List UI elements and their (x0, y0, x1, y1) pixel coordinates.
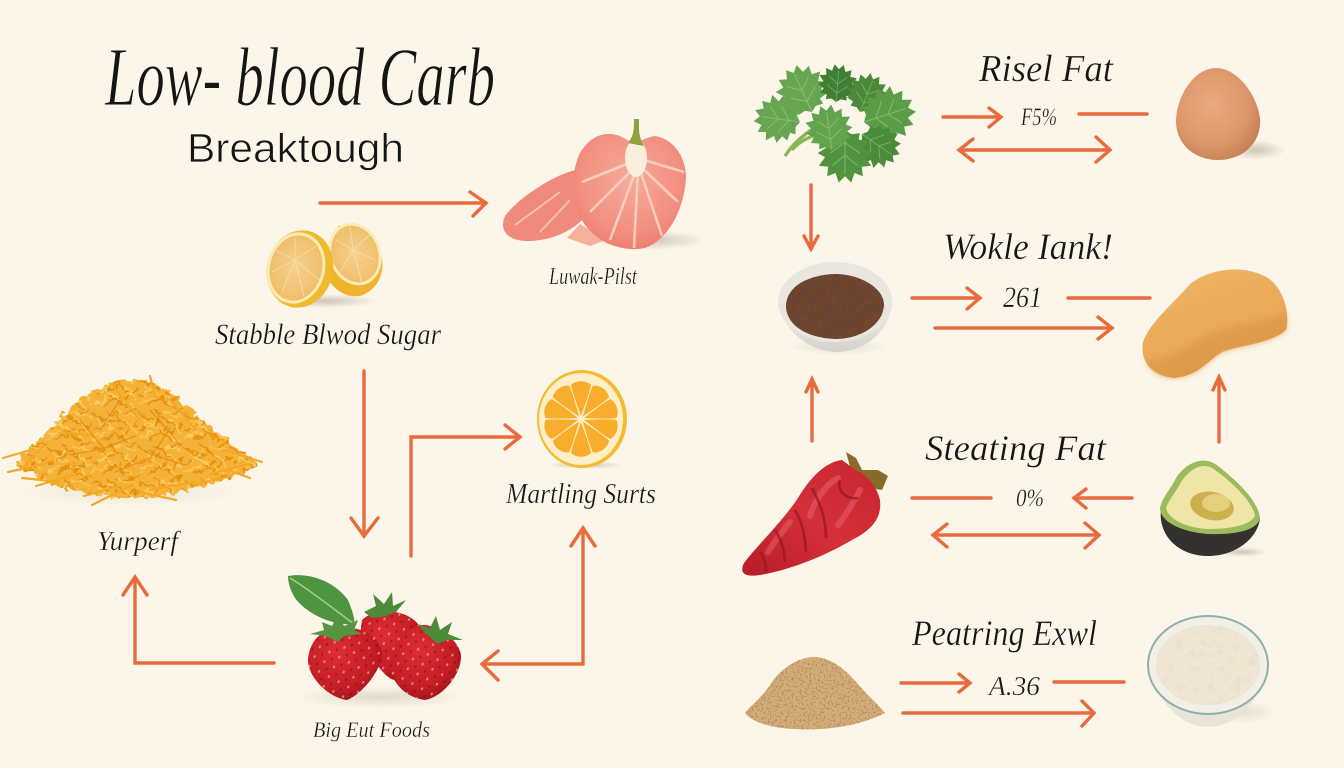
white core (625, 139, 647, 177)
icon: grapefruit (503, 119, 706, 250)
left lemon flesh (259, 226, 333, 310)
icon: avocado (1160, 461, 1268, 557)
icon: grain pile (745, 657, 885, 729)
small wedge (503, 170, 586, 241)
avocado shadow (1216, 547, 1268, 557)
value: 0%: 0% (1016, 485, 1044, 512)
icon: shredded cheese (3, 376, 262, 506)
value: A.36: A.36 (987, 671, 1040, 701)
root leaves (846, 452, 888, 490)
left calyx (310, 614, 362, 642)
line: F5% to egg (1079, 112, 1147, 116)
grain mound (745, 657, 885, 729)
right lemon flesh (320, 215, 390, 293)
value: 261: 261 (1003, 281, 1042, 314)
title: Low- blood Carb (104, 31, 495, 124)
butter shading (1146, 312, 1286, 378)
label: Stabble Blwod Sugar: Stabble Blwod Sugar (215, 318, 441, 351)
orange pith (539, 373, 623, 465)
flour bowl shadow (1208, 700, 1276, 724)
icon: bowl of crumbs (778, 262, 892, 355)
cheese mound (14, 380, 258, 498)
egg shell (1176, 68, 1260, 160)
icon: parsley (751, 57, 922, 183)
right strawberry (391, 625, 461, 700)
bowl rim (778, 262, 892, 342)
arrow: double row one (959, 137, 1110, 162)
line: 261 to butter (1068, 296, 1150, 300)
right calyx (418, 616, 463, 644)
icon: flour bowl (1148, 616, 1276, 727)
root body (742, 460, 880, 576)
back strawberry (360, 611, 421, 680)
icon: egg (1176, 68, 1286, 160)
orange segments (542, 381, 620, 457)
crumbs (786, 274, 884, 339)
arrow: row two (935, 317, 1112, 339)
parsley stems (785, 118, 830, 156)
subtitle: Breaktough (187, 125, 404, 171)
arrow: bowl to 261 (912, 288, 980, 309)
arrow: avocado to 0% (1074, 489, 1132, 508)
icon: red root vegetable (742, 452, 888, 576)
strawberry shadow (295, 686, 465, 708)
icon: orange slice (537, 370, 627, 469)
line: A.36 to flour (1054, 680, 1124, 684)
root highlights (768, 478, 860, 552)
left lemon rind (259, 223, 341, 315)
cheese shadow (18, 478, 242, 506)
left strawberry (308, 628, 382, 700)
arrow: parsley to F5% (943, 108, 1001, 127)
flour (1156, 625, 1260, 705)
strawberry leaf (288, 575, 354, 624)
cheese strands (3, 376, 262, 505)
label: Luwak-Pilst: Luwak-Pilst (548, 264, 638, 290)
back calyx (364, 592, 406, 618)
cheese inner shadow strands (70, 400, 185, 472)
icon: butternut shape (1142, 269, 1287, 378)
pulp veins (582, 160, 684, 248)
glass rim (1148, 616, 1268, 714)
heading: Peatring Exwl: Peatring Exwl (911, 613, 1097, 653)
lemon shadow (273, 294, 377, 308)
bowl body (779, 300, 892, 352)
arrow: double row three (933, 523, 1099, 548)
large wedge (573, 134, 686, 249)
butter body (1142, 269, 1287, 378)
line: carrot to 0% (912, 496, 991, 500)
avocado flesh edge (1160, 461, 1260, 534)
egg shadow (1226, 140, 1286, 160)
arrow: row four (903, 701, 1094, 726)
avocado skin (1161, 510, 1260, 556)
avocado flesh (1166, 466, 1255, 529)
arrow: double elbow berries and Martling Surts (482, 528, 595, 680)
heading: Risel Fat: Risel Fat (978, 48, 1114, 90)
arrow: parsley down to bowl (804, 185, 818, 249)
parsley leaves (751, 57, 922, 183)
orange shadow (547, 461, 623, 469)
lower wedge (567, 224, 606, 246)
arrow: carrot up to bowl (806, 379, 818, 441)
arrow: blood sugar down to berries (351, 371, 378, 536)
right lemon rind (328, 225, 382, 296)
arrow: grain to A.36 (901, 674, 970, 692)
arrow: berries to Yurperf (123, 577, 274, 663)
bowl shadow (788, 339, 888, 355)
heading: Steating Fat: Steating Fat (925, 428, 1107, 468)
label: Yurperf: Yurperf (97, 526, 182, 556)
lemon segment lines (272, 226, 375, 296)
icon: lemon halves (259, 215, 390, 315)
avocado pit hollow (1188, 488, 1236, 524)
flour bowl body (1150, 665, 1266, 727)
value: F5%: F5% (1020, 104, 1057, 131)
arrow: avocado up to butter (1213, 377, 1225, 442)
arrow: berries to orange (411, 425, 520, 556)
orange rind (537, 370, 627, 468)
grapefruit shadow (594, 230, 706, 250)
label: Martling Surts: Martling Surts (505, 478, 656, 510)
icon: strawberries (288, 575, 465, 708)
label: Big Eut Foods: Big Eut Foods (313, 717, 430, 742)
heading: Wokle Iank!: Wokle Iank! (943, 227, 1113, 268)
stem (628, 119, 644, 146)
arrow: title to grapefruit (320, 192, 486, 216)
root ridges (760, 480, 858, 572)
